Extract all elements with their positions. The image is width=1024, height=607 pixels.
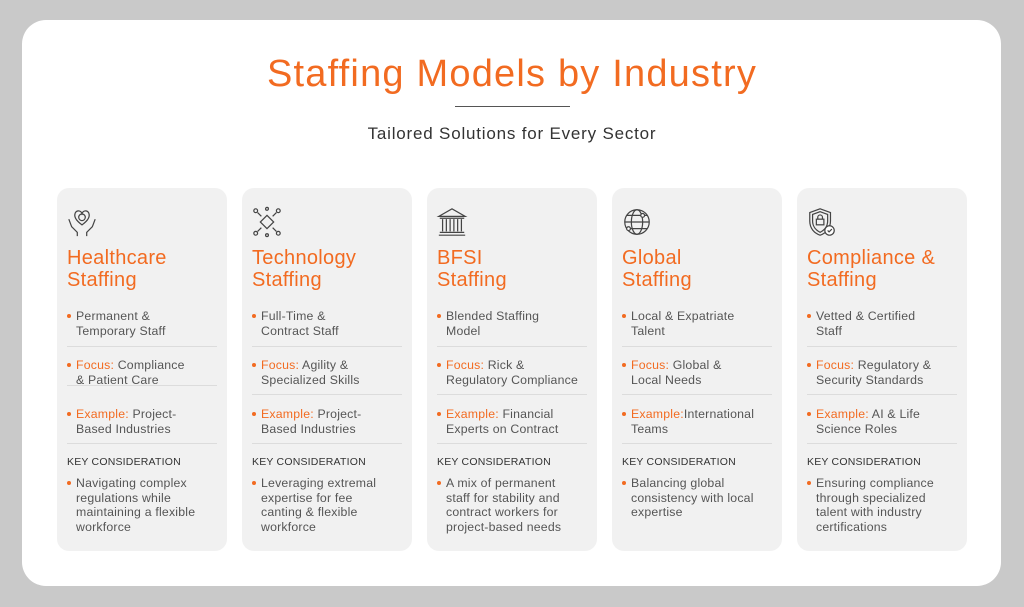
panel: BFSI: A mix of permanent staff for stability and contract workers for project-based needs	[446, 476, 561, 534]
heading: Global	[622, 247, 682, 269]
icon: heart hands	[68, 210, 96, 236]
panel: compliance: KEY CONSIDERATION	[807, 456, 921, 468]
panel: healthcare: & Patient Care	[76, 372, 159, 386]
heading: Healthcare	[67, 247, 167, 269]
panel: compliance: Ensuring compliance through specialized talent with industry certifications	[816, 476, 934, 534]
panel: BFSI: Model	[446, 324, 480, 338]
icon: globe	[624, 209, 650, 235]
heading: Staffing	[252, 269, 322, 291]
heading	[437, 247, 507, 291]
panel: BFSI: Focus: Rick &	[446, 358, 524, 372]
panel: technology: KEY CONSIDERATION	[252, 456, 366, 468]
heading: Compliance &	[807, 247, 935, 269]
heading	[67, 247, 167, 291]
panel: global: Teams	[631, 422, 668, 436]
heading: Staffing	[437, 269, 507, 291]
panel: BFSI: KEY CONSIDERATION	[437, 456, 551, 468]
panel: technology: Leveraging extremal expertise for fee canting & flexible workforce	[261, 476, 376, 534]
panel: healthcare: Example: Project-	[76, 407, 176, 421]
icon: circuit	[253, 206, 281, 238]
panel: technology: Focus: Agility &	[261, 358, 348, 372]
heading	[252, 247, 356, 291]
heading	[807, 247, 935, 291]
panel: healthcare: Based Industries	[76, 422, 171, 436]
panel: global: Focus: Global &	[631, 358, 722, 372]
panel: compliance	[797, 188, 967, 551]
panel: healthcare	[57, 188, 227, 551]
icon: bank	[436, 208, 468, 236]
panel: global: Talent	[631, 324, 665, 338]
panel: BFSI: Blended Staffing	[446, 309, 539, 323]
panel: healthcare: Navigating complex regulations while maintaining a flexible workforce	[76, 476, 195, 534]
panel: healthcare: Temporary Staff	[76, 324, 166, 338]
heading: Staffing	[622, 269, 692, 291]
panel: compliance: Science Roles	[816, 422, 897, 436]
panel: compliance: Example: AI & Life	[816, 407, 920, 421]
panel: global: Balancing global consistency with local expertise	[631, 476, 754, 519]
heading	[622, 247, 692, 291]
heading: Staffing	[807, 269, 877, 291]
panel: global: Local Needs	[631, 372, 702, 386]
panel: compliance: Vetted & Certified	[816, 309, 915, 323]
panel: global: KEY CONSIDERATION	[622, 456, 736, 468]
panel: healthcare: Permanent &	[76, 309, 150, 323]
panel: BFSI: Regulatory Compliance	[446, 372, 578, 386]
panel: BFSI	[427, 188, 597, 551]
panel: BFSI: Example: Financial	[446, 407, 554, 421]
panel: technology: Specialized Skills	[261, 372, 360, 386]
heading: BFSI	[437, 247, 483, 269]
panel: global: Example:International	[631, 407, 754, 421]
panel: technology: Contract Staff	[261, 324, 339, 338]
panel: technology: Full-Time &	[261, 309, 326, 323]
icon: shield lock	[809, 208, 835, 236]
panel: healthcare: KEY CONSIDERATION	[67, 456, 181, 468]
panel: technology: Based Industries	[261, 422, 356, 436]
subtitle: Tailored Solutions for Every Sector	[368, 124, 656, 143]
panel: BFSI: Experts on Contract	[446, 422, 558, 436]
panel: compliance: Focus: Regulatory &	[816, 358, 931, 372]
panel: compliance: Staff	[816, 324, 842, 338]
panel: technology: Example: Project-	[261, 407, 361, 421]
panel: global	[612, 188, 782, 551]
title: Staffing Models by Industry	[267, 53, 757, 95]
panel: global: Local & Expatriate	[631, 309, 734, 323]
heading: Technology	[252, 247, 356, 269]
heading: Staffing	[67, 269, 137, 291]
panel: technology	[242, 188, 412, 551]
panel: compliance: Security Standards	[816, 372, 924, 386]
panel: healthcare: Focus: Compliance	[76, 358, 185, 372]
